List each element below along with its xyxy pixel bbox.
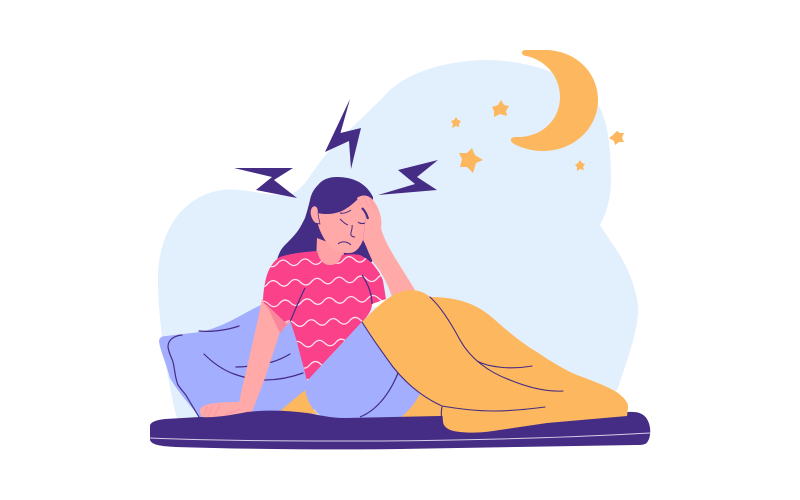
background blob: [158, 60, 638, 418]
shoulder shadow on left arm: [266, 304, 290, 333]
pillow: [159, 303, 325, 418]
white gap under the right sleeve: [372, 296, 386, 308]
right arm and hand: [357, 195, 415, 297]
face: [310, 196, 375, 253]
illustration: woman with a headache at night: [150, 50, 650, 450]
neck: [316, 238, 345, 270]
pants and raised leg: [307, 322, 421, 418]
stars: [451, 100, 624, 173]
blanket: [362, 290, 628, 433]
yellow sheet under the leg: [280, 390, 444, 419]
moon: [511, 50, 598, 151]
hair back: [277, 177, 373, 262]
mattress: [150, 411, 650, 449]
lightning bolts: [234, 99, 438, 198]
left arm and hand: [200, 299, 292, 419]
shirt with wave pattern: [263, 251, 386, 381]
